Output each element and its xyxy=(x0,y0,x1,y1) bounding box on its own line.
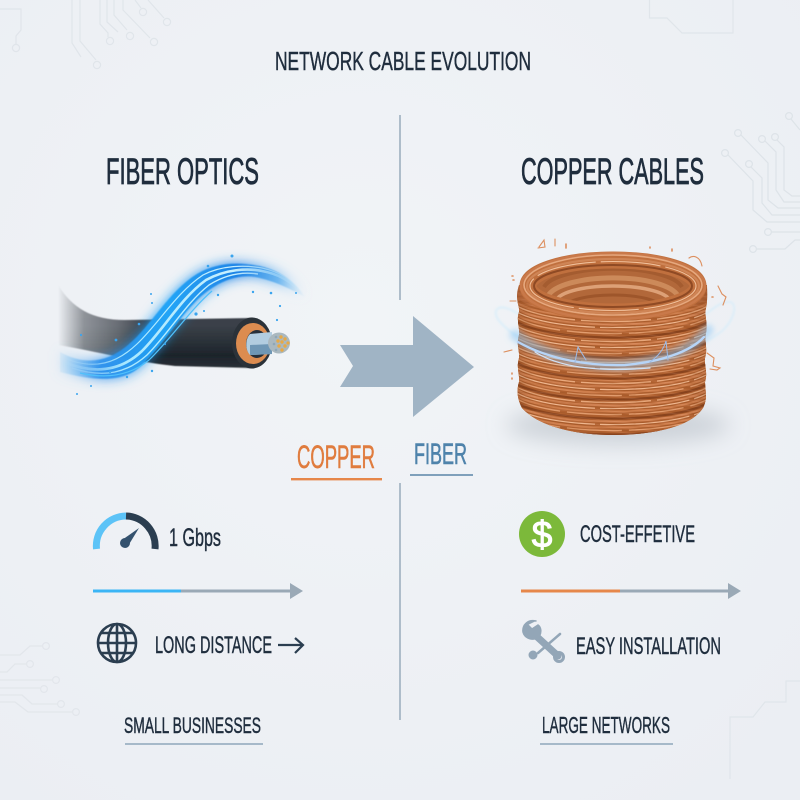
underline: large networks xyxy=(540,743,673,745)
long distance text: LONG DISTANCE xyxy=(155,632,272,659)
speed value: 1 Gbps xyxy=(169,524,221,552)
icon: wrench and screwdriver xyxy=(523,621,564,662)
large networks label: LARGE NETWORKS xyxy=(542,712,670,738)
copper progress bar xyxy=(521,583,741,599)
coil top ring xyxy=(521,253,705,319)
icon: dollar xyxy=(519,511,565,557)
label: copper xyxy=(291,439,382,480)
label: fiber: FIBER xyxy=(414,438,467,471)
arrow: distance xyxy=(278,638,303,653)
inner conductor xyxy=(246,332,272,355)
illustration: copper coil xyxy=(496,239,734,445)
circuit pattern: bottom right xyxy=(730,681,800,779)
icon: dollar: $ xyxy=(532,514,552,555)
center divider: top xyxy=(399,115,401,300)
cost effective text: COST-EFFETIVE xyxy=(580,521,695,548)
fiber progress bar xyxy=(93,583,303,599)
circuit pattern: bottom left xyxy=(0,643,79,715)
coil windings xyxy=(518,300,707,435)
heading: fiber optics: FIBER OPTICS xyxy=(106,151,259,192)
circuit pattern: top right xyxy=(650,0,733,33)
wire bundle xyxy=(273,335,290,352)
light particles xyxy=(76,254,297,395)
center divider: bottom xyxy=(399,483,401,720)
cable body xyxy=(58,285,253,368)
coil shadow xyxy=(506,405,730,445)
circuit pattern: right side xyxy=(722,113,800,252)
big arrow xyxy=(340,316,474,417)
label: fiber xyxy=(410,438,473,476)
blue glow behind coil xyxy=(496,302,734,342)
title: NETWORK CABLE EVOLUTION xyxy=(275,46,531,76)
label: copper: COPPER xyxy=(297,439,375,475)
cable end face xyxy=(232,318,272,368)
illustration: fiber optic cable xyxy=(58,254,305,395)
copper ring xyxy=(236,323,270,364)
panel: copper stats xyxy=(519,511,741,745)
blue light wave xyxy=(60,264,305,379)
icon: speed gauge xyxy=(96,516,155,549)
icon: globe xyxy=(98,624,136,662)
coil body xyxy=(517,285,708,435)
electric arc xyxy=(515,330,708,369)
underline: small businesses xyxy=(125,743,263,745)
circuit pattern: top left xyxy=(0,0,171,69)
small businesses label: SMALL BUSINESSES xyxy=(124,713,261,738)
copper sparks xyxy=(504,239,726,379)
panel: fiber stats xyxy=(93,516,303,745)
